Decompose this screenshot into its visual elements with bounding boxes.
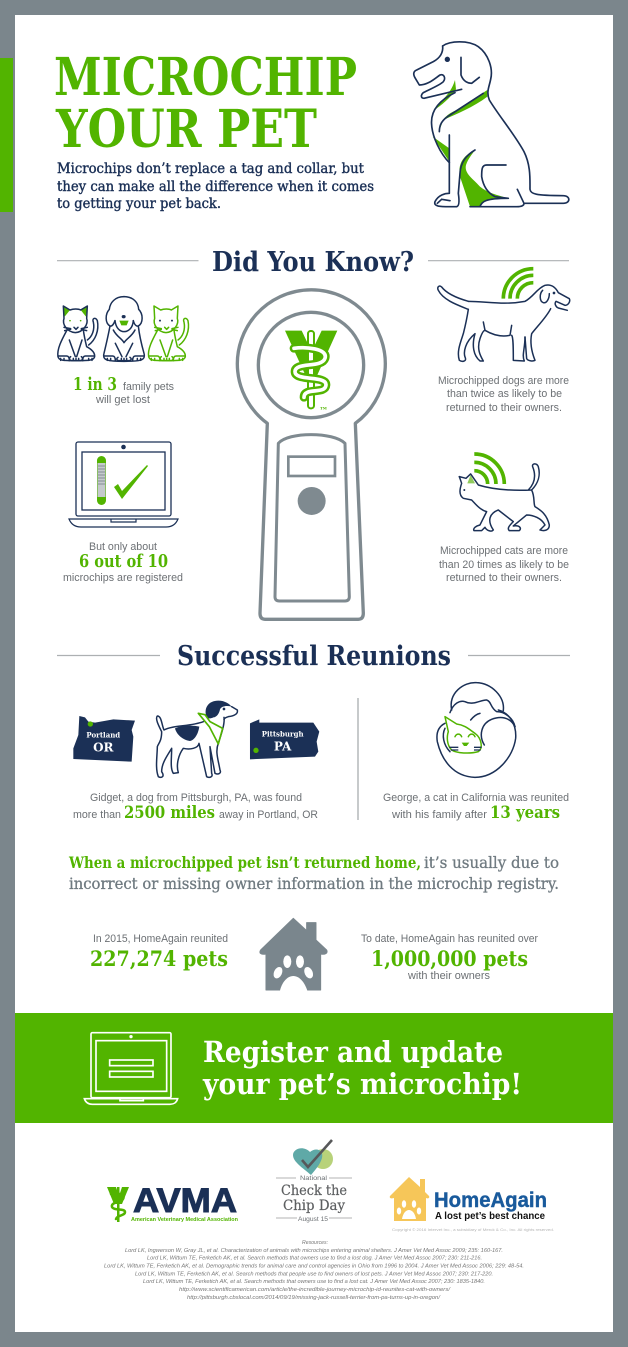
resources text: Lord LK, Wittum TE, Ferketich AK, et al. Demographic trends for animal care and control agencies in Ohio from 1996 to 2004. J Amer Vet Med Assoc 2006; 229: 48-54. <box>104 1264 524 1270</box>
panel: microchipped dogs stat: returned to their owners. <box>446 402 562 414</box>
panel: lost pets stat: will get lost <box>95 394 150 406</box>
intro text: they can make all the difference when it comes <box>57 179 374 195</box>
map: Pennsylvania: Pittsburgh <box>262 730 304 739</box>
logo: HomeAgain: Copyright © 2016 Intervet Inc., a subsidiary of Merck & Co., Inc. All rights reserved. <box>392 1227 554 1232</box>
intro text <box>57 161 374 212</box>
logo: Check the Chip Day <box>276 1140 352 1223</box>
panel: call to action banner: your pet’s microchip! <box>202 1067 522 1101</box>
panel: George story: with his family after <box>391 809 487 821</box>
logo: HomeAgain <box>390 1177 554 1232</box>
heading: Successful Reunions: Successful Reunions <box>177 641 451 672</box>
panel: George story: 13 years <box>490 803 560 823</box>
resources text <box>104 1240 524 1301</box>
icon: dog with bandana <box>157 701 237 777</box>
story text: Gidget, a dog from Pittsburgh, PA, was found <box>90 792 302 804</box>
heading: Did You Know: Did You Know? <box>212 247 414 278</box>
resources text: http://pittsburgh.cbslocal.com/2014/09/19/missing-jack-russell-terrier-from-pa-turns-up-in-oregon/ <box>187 1295 441 1301</box>
statement text <box>68 853 559 893</box>
icon: laptop with form <box>84 1033 178 1104</box>
logo: HomeAgain: HomeAgain <box>434 1189 547 1212</box>
title <box>54 47 357 160</box>
panel: Gidget story: away in Portland, OR <box>219 809 318 821</box>
panel: Gidget story: more than <box>73 809 121 821</box>
panel: 2015 reunited stat <box>90 933 228 972</box>
panel: Gidget story: 2500 miles <box>124 803 215 823</box>
logo: Check the Chip Day: August 15 <box>298 1216 328 1223</box>
map: Pennsylvania <box>250 719 319 759</box>
panel: microchipped cats stat <box>439 454 569 584</box>
panel: registered microchips stat <box>63 442 183 584</box>
resources text: Lord LK, Wittum TE, Ferketich AK, et al. Search methods that people use to find owners of lost pets. J Amer Vet Med Assoc 2007; 230: 217-220. <box>135 1272 493 1278</box>
panel: total reunited stat: 1,000,000 pets <box>371 947 528 972</box>
call to action text: Register and update <box>203 1035 503 1069</box>
resources text: Resources: <box>302 1240 328 1246</box>
logo: AVMA <box>107 1182 238 1223</box>
statement text: incorrect or missing owner information in the microchip registry. <box>69 875 559 893</box>
title: YOUR PET <box>55 99 317 160</box>
panel: lost pets stat: family pets <box>123 381 175 393</box>
statement text: When a microchipped pet isn’t returned home, <box>68 853 421 872</box>
stat text: Microchipped cats are more <box>440 545 568 557</box>
resources text: Lord LK, Wittum TE, Ferketich AK, et al. Search methods that owners use to find a lost dog. J Amer Vet Med Assoc 2007; 230: 211-216. <box>147 1256 482 1262</box>
accent bar <box>0 58 13 212</box>
panel: George story <box>383 683 569 823</box>
panel: microchipped dogs stat <box>438 269 570 414</box>
resources text: Lord LK, Wittum TE, Ferketich AK, et al. Search methods that owners use to find a lost cat. J Amer Vet Med Assoc 2007; 230: 1835-1840. <box>143 1279 485 1285</box>
icon: person hugging cat <box>437 683 516 777</box>
intro text: Microchips don’t replace a tag and collar, but <box>57 161 365 177</box>
statement text: it’s usually due to <box>424 854 559 872</box>
icon: laptop with chip and check <box>69 442 178 527</box>
map: Oregon: Portland <box>86 730 120 739</box>
icon: cat, dog and cat <box>58 297 189 361</box>
icon: dog with signal waves <box>438 269 570 361</box>
panel: total reunited stat <box>361 933 538 982</box>
panel: 2015 reunited stat: In 2015, HomeAgain reunited <box>93 933 228 945</box>
panel: microchipped cats stat: than 20 times as likely to be <box>439 559 569 571</box>
map: Pennsylvania: PA <box>274 740 292 754</box>
logo: AVMA: American Veterinary Medical Association <box>131 1217 238 1223</box>
story text: George, a cat in California was reunited <box>383 792 569 804</box>
stat text: But only about <box>89 541 157 553</box>
panel: 2015 reunited stat: 227,274 pets <box>90 947 228 972</box>
map: Oregon: OR <box>93 741 115 755</box>
intro text: to getting your pet back. <box>57 196 221 212</box>
resources text: Lord LK, Ingwerson W, Gray JL, et al. Characterization of animals with microchips entering animal shelters. J Amer Vet Med Assoc 2009; 235: 160-167. <box>125 1248 503 1254</box>
logo: Check the Chip Day: Chip Day <box>283 1198 345 1214</box>
panel: registered microchips stat: 6 out of 10 <box>79 551 168 572</box>
logo: AVMA: AVMA <box>133 1182 237 1220</box>
icon: microchip scanner <box>237 290 385 619</box>
stat text: 1 in 3 <box>73 374 117 395</box>
logo: HomeAgain: A lost pet’s best chance <box>435 1210 545 1222</box>
logo: Check the Chip Day: Check the <box>281 1183 347 1199</box>
panel: call to action banner <box>15 1013 613 1123</box>
panel: total reunited stat: To date, HomeAgain has reunited over <box>361 933 538 945</box>
icon: cat with signal waves <box>459 454 549 531</box>
logo: Check the Chip Day: National <box>300 1175 328 1182</box>
panel: lost pets stat <box>58 297 189 406</box>
stat text: Microchipped dogs are more <box>438 375 569 387</box>
panel: total reunited stat: with their owners <box>407 970 491 982</box>
panel: microchipped cats stat: returned to their owners. <box>446 572 562 584</box>
icon: house with paw <box>260 918 327 991</box>
icon: veterinary caduceus logo: TM <box>320 406 327 410</box>
panel: registered microchips stat: microchips are registered <box>63 572 183 584</box>
icon: veterinary caduceus logo <box>285 331 337 410</box>
icon: sitting dog <box>414 42 569 207</box>
resources text: http://www.scientificamerican.com/article/the-incredible-journey-microchip-id-reunites-cat-with-owners/ <box>179 1287 451 1293</box>
title: MICROCHIP <box>54 47 357 108</box>
panel: Gidget story <box>73 701 319 823</box>
map: Oregon <box>73 716 135 762</box>
panel: microchipped dogs stat: than twice as likely to be <box>447 388 562 400</box>
